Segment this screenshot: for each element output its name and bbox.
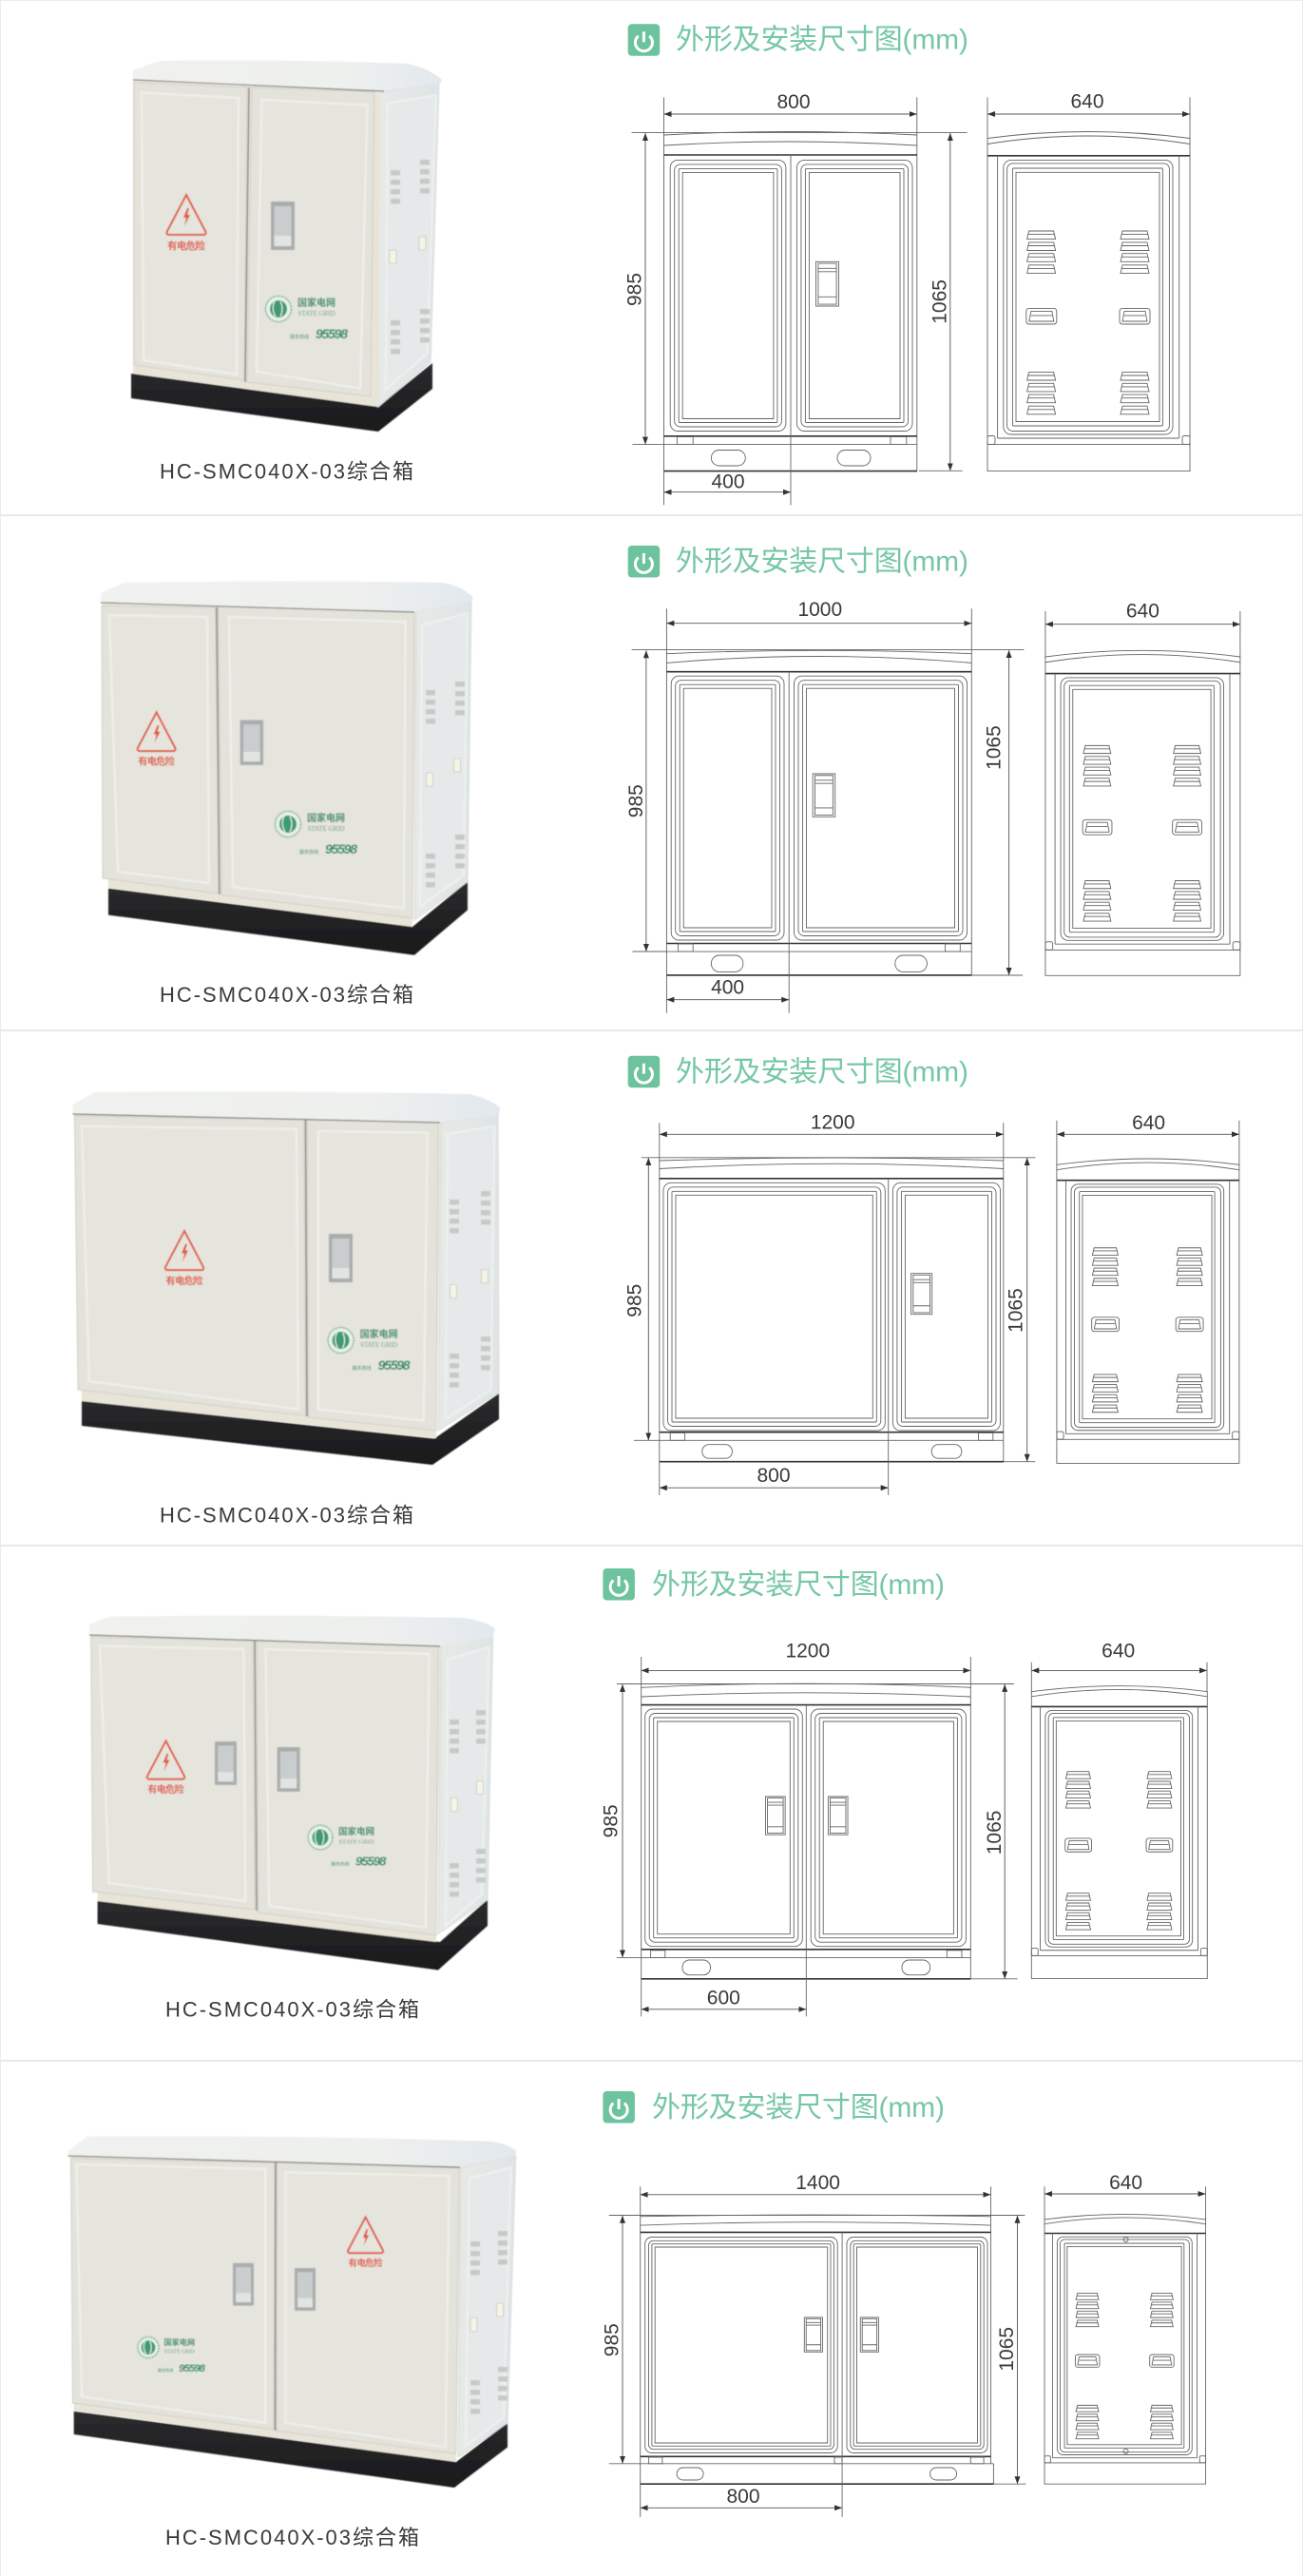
photo: cabinet 1400 <box>68 2136 516 2488</box>
heading icon: power button <box>628 1056 660 1087</box>
icon: State Grid logo: STATE GRID <box>298 310 335 317</box>
front view drawing with dimensions: 1065 <box>983 725 1006 770</box>
front view drawing with dimensions <box>625 599 1024 1013</box>
caption: HC-SMC040X-03综合箱 <box>160 1503 413 1527</box>
icon: State Grid logo <box>266 297 348 341</box>
icon: State Grid logo <box>138 2337 205 2374</box>
front view drawing with dimensions: 800 <box>726 2486 760 2508</box>
icon: State Grid logo: 国家电网 <box>307 812 345 824</box>
icon: State Grid logo: 服务热线 <box>299 849 318 855</box>
icon: high voltage warning: 有电危险 <box>138 756 176 768</box>
front view drawing with dimensions <box>623 91 968 505</box>
heading: dimensions: 外形及安装尺寸图(mm) <box>676 1056 968 1087</box>
icon: State Grid logo: STATE GRID <box>164 2349 195 2355</box>
front view drawing with dimensions: 600 <box>707 1987 740 2009</box>
panel: model row 3 (1200 wide, wide left door) <box>72 1056 1239 1527</box>
icon: State Grid logo: 服务热线 <box>331 1860 350 1867</box>
front view drawing with dimensions: 400 <box>711 471 745 492</box>
front view drawing with dimensions: 1200 <box>785 1640 830 1662</box>
front view drawing with dimensions: 1065 <box>996 2327 1018 2372</box>
heading icon: power button <box>603 2091 635 2124</box>
photo: cabinet 1200 A <box>72 1091 500 1465</box>
heading: dimensions: 外形及安装尺寸图(mm) <box>652 2092 945 2124</box>
panel: model row 4 (1200 wide, equal doors) <box>89 1568 1207 2022</box>
front view drawing with dimensions: 1200 <box>811 1112 855 1133</box>
icon: State Grid logo: 服务热线 <box>353 1365 372 1372</box>
panel: model row 5 (1400 wide) <box>68 2091 1206 2549</box>
icon: high voltage warning <box>348 2217 383 2269</box>
side view drawing with dimensions: 640 <box>1126 601 1159 622</box>
icon: high voltage warning: 有电危险 <box>349 2258 383 2269</box>
icon: State Grid logo: 国家电网 <box>297 297 335 309</box>
icon: State Grid logo: 国家电网 <box>163 2337 195 2347</box>
side view drawing with dimensions <box>987 91 1190 471</box>
panel: model row 2 (1000 wide) <box>101 546 1240 1013</box>
side view drawing with dimensions <box>1031 1640 1207 1979</box>
side view drawing with dimensions <box>1045 601 1240 975</box>
icon: State Grid logo <box>308 1825 387 1868</box>
icon: State Grid logo: 服务热线 <box>290 334 309 340</box>
icon: State Grid logo: 95598 <box>378 1357 411 1373</box>
side view drawing with dimensions <box>1044 2172 1206 2484</box>
heading icon: power button <box>628 546 660 578</box>
row divider 4 <box>0 2060 1303 2062</box>
front view drawing with dimensions: 400 <box>711 977 744 998</box>
heading icon: power button <box>628 24 660 56</box>
icon: State Grid logo: 服务热线 <box>158 2367 173 2373</box>
front view drawing with dimensions: 985 <box>600 1804 622 1837</box>
icon: State Grid logo: STATE GRID <box>360 1341 397 1349</box>
caption: HC-SMC040X-03综合箱 <box>165 2526 419 2549</box>
caption: HC-SMC040X-03综合箱 <box>160 460 413 483</box>
icon: high voltage warning <box>147 1740 184 1796</box>
front view drawing with dimensions <box>602 2172 1025 2517</box>
front view drawing with dimensions: 1065 <box>984 1811 1006 1855</box>
icon: high voltage warning <box>166 195 206 252</box>
icon: State Grid logo: 国家电网 <box>360 1328 398 1340</box>
icon: high voltage warning: 有电危险 <box>165 1275 203 1287</box>
photo: cabinet 800 <box>131 60 442 432</box>
side view drawing with dimensions: 640 <box>1070 91 1104 112</box>
icon: State Grid logo: STATE GRID <box>308 825 344 833</box>
side view drawing with dimensions: 640 <box>1109 2172 1142 2194</box>
front view drawing with dimensions: 1065 <box>929 279 950 324</box>
front view drawing with dimensions <box>623 1112 1035 1495</box>
photo: cabinet 1000 <box>101 582 473 955</box>
icon: State Grid logo: 95598 <box>179 2363 205 2374</box>
icon: high voltage warning <box>138 712 176 768</box>
heading icon: power button <box>603 1568 635 1601</box>
front view drawing with dimensions: 1400 <box>795 2172 840 2194</box>
caption: HC-SMC040X-03综合箱 <box>160 983 413 1007</box>
icon: high voltage warning <box>165 1231 203 1287</box>
row divider 1 <box>0 514 1303 516</box>
icon: high voltage warning: 有电危险 <box>167 240 205 252</box>
icon: State Grid logo: 95598 <box>316 326 348 341</box>
heading: dimensions: 外形及安装尺寸图(mm) <box>652 1569 945 1601</box>
panel: model row 1 (800 wide) <box>131 24 1190 505</box>
icon: State Grid logo: 95598 <box>355 1854 387 1868</box>
front view drawing with dimensions: 985 <box>602 2323 623 2356</box>
front view drawing with dimensions: 985 <box>623 273 646 306</box>
front view drawing with dimensions <box>600 1640 1017 2016</box>
icon: high voltage warning: 有电危险 <box>147 1783 184 1796</box>
front view drawing with dimensions: 985 <box>623 1284 645 1317</box>
caption: HC-SMC040X-03综合箱 <box>165 1998 419 2022</box>
side view drawing with dimensions <box>1057 1112 1239 1463</box>
front view drawing with dimensions: 985 <box>625 784 647 817</box>
icon: State Grid logo: 国家电网 <box>338 1826 374 1837</box>
icon: State Grid logo <box>328 1327 411 1373</box>
heading: dimensions: 外形及安装尺寸图(mm) <box>676 25 968 56</box>
side view drawing with dimensions: 640 <box>1102 1640 1135 1662</box>
front view drawing with dimensions: 1000 <box>797 599 842 621</box>
icon: State Grid logo <box>276 812 357 856</box>
front view drawing with dimensions: 800 <box>776 91 811 113</box>
heading: dimensions: 外形及安装尺寸图(mm) <box>676 547 968 578</box>
icon: State Grid logo: STATE GRID <box>338 1839 374 1846</box>
row divider 3 <box>0 1545 1303 1547</box>
photo: cabinet 1200 B <box>89 1616 494 1970</box>
row divider 2 <box>0 1029 1303 1031</box>
front view drawing with dimensions: 800 <box>757 1465 791 1487</box>
side view drawing with dimensions: 640 <box>1132 1112 1165 1134</box>
icon: State Grid logo: 95598 <box>325 841 357 856</box>
front view drawing with dimensions: 1065 <box>1006 1288 1027 1333</box>
